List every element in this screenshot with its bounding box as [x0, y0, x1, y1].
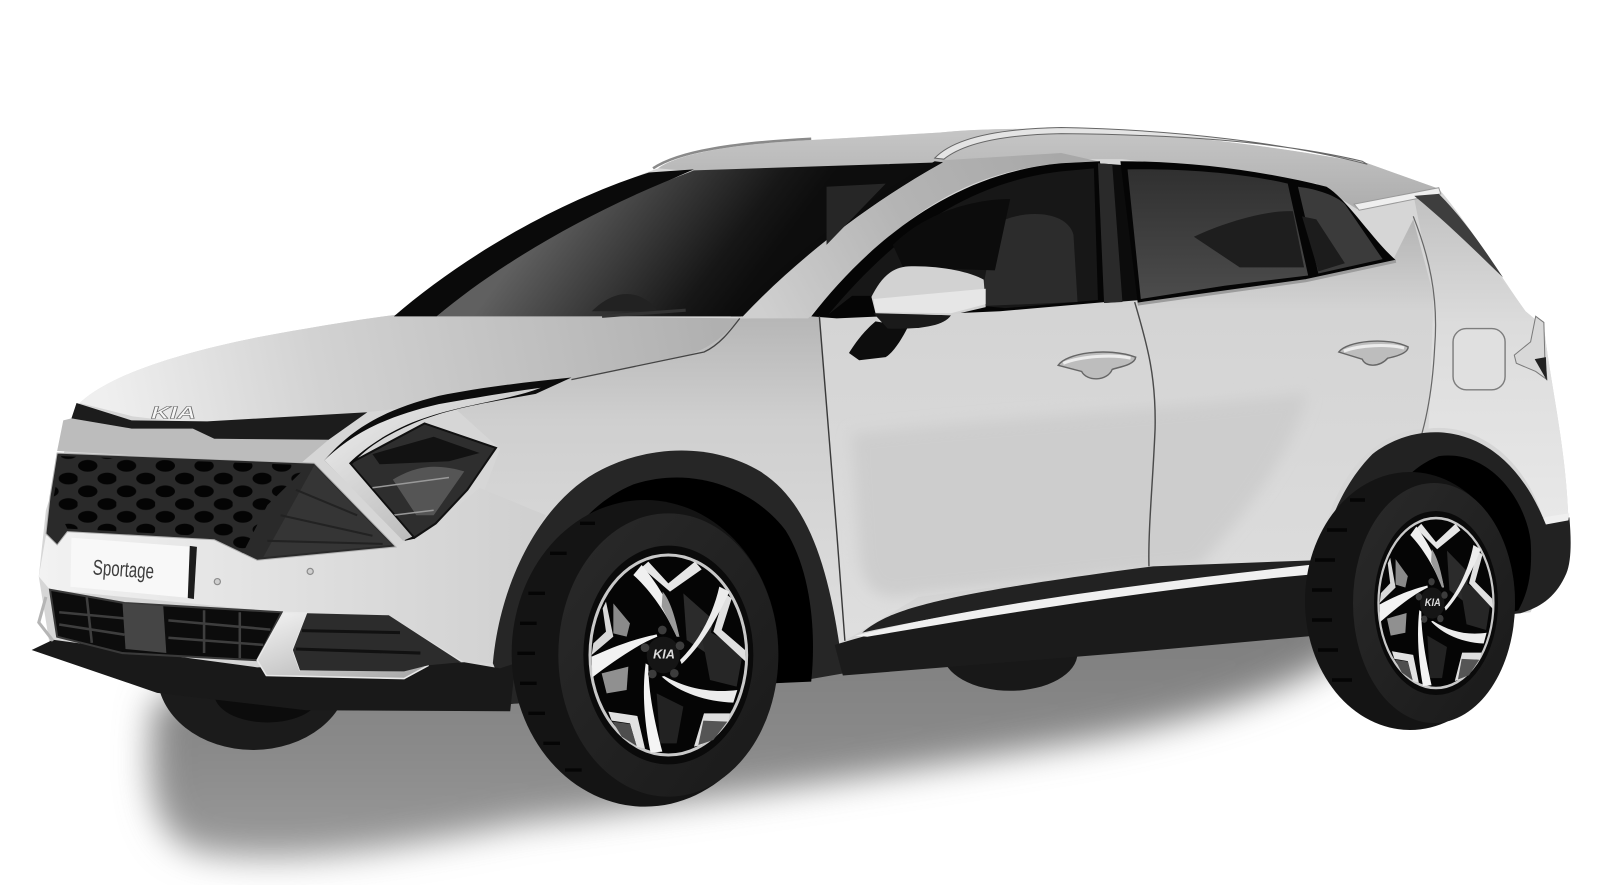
front alloy rim	[590, 555, 747, 755]
far roof rail	[653, 139, 811, 168]
rear alloy rim	[1378, 518, 1493, 688]
door side reflection	[852, 393, 1308, 596]
roof	[658, 128, 1439, 209]
tail light	[1514, 316, 1547, 381]
ground shadow	[151, 600, 1350, 857]
windshield wiper	[602, 310, 686, 316]
rear door seam	[1135, 302, 1155, 566]
lower grille	[50, 590, 282, 660]
main grille	[46, 453, 396, 560]
doors panel	[819, 219, 1434, 641]
black hood strip	[71, 403, 367, 440]
chrome sill strip	[855, 564, 1315, 637]
daytime running light	[324, 378, 571, 541]
number plate: Sportage	[92, 555, 155, 584]
hood	[80, 314, 740, 423]
front wheel well	[526, 478, 813, 694]
number plate	[70, 538, 197, 599]
far front tyre	[157, 597, 349, 750]
car body silhouette	[39, 129, 1568, 704]
A-pillar	[737, 153, 1098, 318]
rear side window	[1120, 161, 1396, 303]
rear spoiler strip	[1354, 188, 1441, 210]
wing mirror	[849, 266, 986, 360]
rear wheel	[1305, 472, 1515, 730]
front wheel	[512, 500, 778, 807]
rear wheel arch	[1316, 432, 1571, 635]
front door handle	[1058, 352, 1136, 379]
roof rail	[935, 128, 1367, 164]
rear tyre	[1305, 472, 1515, 730]
hub logo: KIA	[653, 647, 675, 661]
rear wheel well	[1349, 455, 1531, 638]
far rear tyre	[943, 615, 1078, 691]
front door seam	[819, 316, 845, 641]
rear bumper highlight	[1543, 513, 1569, 524]
honeycomb mesh	[53, 456, 308, 553]
rear door handle	[1339, 341, 1408, 365]
front wheel arch	[493, 450, 843, 704]
rear alloy rim: KIA	[1425, 597, 1441, 609]
front lower valance	[32, 640, 515, 711]
grille top bar	[57, 418, 329, 462]
quarter seam	[1413, 216, 1436, 439]
front fender	[245, 316, 845, 663]
B-pillar	[1098, 163, 1141, 303]
KIA badge: KIA	[151, 402, 196, 422]
windshield	[394, 161, 943, 316]
parking sensors	[214, 568, 313, 585]
fog lamp housing	[257, 612, 461, 679]
front side chrome details	[39, 597, 53, 641]
rear window sliver	[1414, 194, 1503, 278]
rear arch highlight	[1378, 446, 1525, 500]
front bumper panel	[39, 488, 546, 663]
fuel flap	[1453, 329, 1505, 390]
lower side sill	[835, 560, 1327, 676]
rear quarter panel	[1413, 194, 1568, 520]
front side window	[811, 161, 1106, 318]
hood seam	[571, 318, 740, 380]
front tyre	[512, 500, 778, 807]
headlight	[350, 423, 496, 538]
window belt line	[1138, 261, 1396, 304]
centre block	[122, 603, 166, 653]
